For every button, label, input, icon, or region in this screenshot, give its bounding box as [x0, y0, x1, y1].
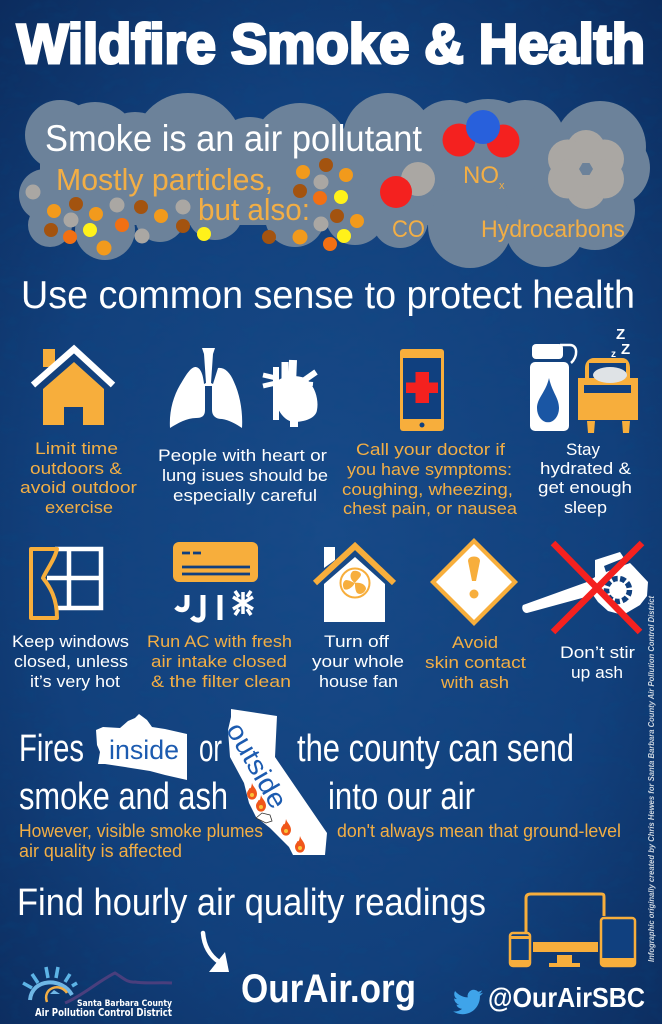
map: california — [228, 709, 327, 855]
icon: twitter bird — [453, 990, 483, 1014]
item: keep windows closed — [12, 549, 129, 691]
text: avoid skin contact: skin contact — [425, 654, 526, 672]
text: turn off fan — [312, 633, 404, 691]
text: keep windows — [12, 633, 129, 691]
text: run AC: air intake closed — [151, 653, 287, 671]
text: limit time: Limit time — [35, 440, 118, 458]
molecule: NOx — [442, 110, 520, 158]
text: the county can send: the county can send — [297, 728, 574, 770]
molecule: CO — [380, 162, 435, 208]
title: Wildfire Smoke & Health — [17, 12, 645, 75]
text: stay hydrated: get enough — [538, 479, 632, 497]
logo text: Air Pollution Control District — [35, 1007, 172, 1019]
icon: leaf blower crossed out — [522, 543, 648, 632]
icon: zzz: Z — [616, 326, 625, 343]
text: limit time: outdoors & — [30, 460, 122, 478]
text: people with heart or lung: People with heart or — [158, 447, 328, 465]
text: people with heart or lung: lung isues should be — [162, 467, 328, 485]
text: limit time — [20, 440, 138, 517]
text: turn off fan: house fan — [319, 673, 398, 691]
icon: phone with red cross — [400, 349, 444, 431]
item: avoid skin contact — [425, 538, 526, 692]
handle: @OurAirSBC: @OurAirSBC — [488, 982, 645, 1013]
label: outside: outside — [220, 717, 293, 814]
text: keep windows: closed, unless — [14, 653, 128, 671]
heading: common sense: Use common sense to protect health — [21, 274, 635, 317]
heading: smoke is an air pollutant: Smoke is an air pollutant — [45, 118, 423, 159]
text: avoid skin contact: Avoid — [452, 634, 498, 652]
text: or: or — [199, 728, 222, 770]
text: keep windows: it’s very hot — [30, 673, 120, 691]
text: people with heart or lung: especially careful — [173, 487, 317, 505]
cloud shape — [19, 93, 650, 268]
text: stay hydrated: sleep — [564, 499, 607, 517]
section: inside or outside the county — [19, 709, 621, 861]
icon: air conditioner — [173, 542, 258, 620]
text: mostly particles, but also: but also: — [198, 192, 310, 227]
item: run AC — [147, 542, 292, 691]
logo text — [35, 999, 172, 1019]
text: dont stir — [560, 644, 636, 682]
text: fires: Fires — [19, 728, 84, 770]
icon: bed — [578, 358, 638, 433]
icons: flames — [247, 783, 305, 853]
text: call your doctor — [342, 441, 518, 518]
credit: vertical text: Infographic originally created by Chris Hewes for Santa Barbara County Air Pollution Control District — [647, 596, 656, 962]
text: run AC: Run AC with fresh — [147, 633, 292, 651]
text: turn off fan: Turn off — [324, 633, 389, 651]
text: however visible smoke plumes — [19, 821, 621, 861]
text: call your doctor: you have symptoms: — [347, 461, 512, 479]
icon: window and curtain — [31, 549, 101, 618]
text: stay hydrated: hydrated & — [540, 460, 631, 478]
item: heart and lung — [158, 348, 328, 505]
text: call your doctor: Call your doctor if — [356, 441, 505, 459]
text: stay hydrated: Stay — [566, 441, 601, 459]
text: people with heart or lung — [158, 447, 328, 505]
icon: house — [33, 349, 113, 425]
text: smoke and ash: smoke and ash — [19, 776, 228, 818]
label: CO: CO — [392, 216, 425, 243]
logo text: Santa Barbara County — [77, 999, 172, 1009]
particles — [26, 158, 364, 256]
text: however visible smoke plumes: don't always mean that ground-level — [337, 821, 621, 841]
text: limit time: exercise — [45, 499, 113, 517]
text: mostly particles, but also — [56, 162, 310, 227]
icon: heart — [263, 360, 318, 427]
text: turn off fan: your whole — [312, 653, 404, 671]
icon: devices — [510, 894, 635, 967]
icon: lungs — [170, 348, 242, 428]
text: call your doctor: coughing, wheezing, — [342, 481, 513, 499]
text: mostly particles, but also: Mostly particles, — [56, 162, 273, 197]
item: stay hydrated — [530, 326, 638, 517]
item: limit time outdoors — [20, 349, 138, 517]
logo: Santa Barbara County APCD — [23, 967, 172, 1019]
label: NOx: NO — [463, 162, 499, 189]
icon: zzz — [611, 326, 630, 360]
molecule: hydrocarbons — [548, 130, 624, 209]
text: into our air: into our air — [328, 776, 475, 818]
map: county — [96, 714, 187, 780]
map: county outline — [256, 813, 272, 823]
icon: zzz: z — [611, 349, 616, 360]
text: keep windows: Keep windows — [12, 633, 129, 651]
text: run AC — [147, 633, 292, 691]
item: call your doctor — [342, 349, 518, 518]
text: however visible smoke plumes: However, visible smoke plumes — [19, 821, 263, 841]
logo mark — [23, 967, 172, 1003]
link: OurAir.org: OurAir.org — [241, 967, 416, 1011]
panel: smoke cloud — [19, 93, 650, 268]
label: hydrocarbons: Hydrocarbons — [481, 216, 625, 243]
heading: find hourly readings: Find hourly air quality readings — [17, 882, 486, 924]
text: run AC: & the filter clean — [151, 673, 291, 691]
icon: zzz: Z — [621, 341, 630, 358]
icon: house with fan — [315, 546, 394, 622]
text: avoid skin contact — [425, 634, 526, 692]
text: dont stir: up ash — [571, 664, 623, 682]
text: limit time: avoid outdoor — [20, 479, 138, 497]
arrow — [203, 933, 229, 972]
item: do not stir up ash — [522, 543, 648, 682]
icon: warning diamond — [430, 538, 518, 626]
label: inside: inside — [109, 735, 179, 765]
label: NOx: x — [499, 180, 505, 192]
text: call your doctor: chest pain, or nausea — [343, 500, 518, 518]
text: stay hydrated — [538, 441, 632, 517]
text: avoid skin contact: with ash — [440, 674, 509, 692]
icon: water bottle — [530, 344, 576, 431]
item: whole house fan — [312, 546, 404, 691]
text: dont stir: Don’t stir — [560, 644, 636, 662]
text: however visible smoke plumes: air quality is affected — [19, 841, 182, 861]
